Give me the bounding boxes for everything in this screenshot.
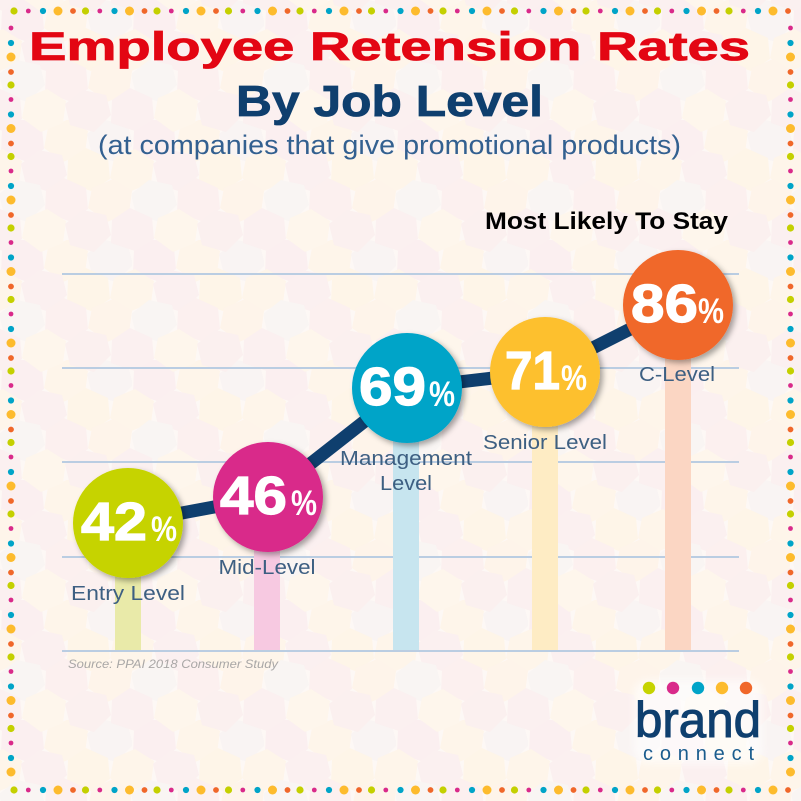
logo wordmark: brand bbox=[635, 692, 761, 748]
grid lines bbox=[62, 274, 739, 651]
chart bbox=[62, 250, 739, 651]
logo tagline: connect bbox=[643, 743, 754, 765]
circle: 69%: % bbox=[429, 375, 455, 414]
circle: 46%: % bbox=[291, 484, 317, 523]
circle: 69%: 69 bbox=[359, 357, 426, 417]
source note: Source: PPAI 2018 Consumer Study bbox=[68, 659, 279, 671]
circle: 86%: 86 bbox=[631, 274, 698, 334]
circle: 71%: 71 bbox=[505, 341, 560, 401]
circle: 86%: % bbox=[698, 292, 724, 331]
circle: 46%: 46 bbox=[220, 466, 287, 526]
qualifier text: (at companies that give promotional products) bbox=[98, 130, 681, 160]
circle: 71% bbox=[490, 317, 600, 427]
circle: 69% bbox=[352, 333, 462, 443]
label: mid level: Mid-Level bbox=[218, 556, 316, 579]
circle: 42%: 42 bbox=[81, 492, 147, 552]
logo halo bbox=[634, 680, 762, 764]
circle: 42% bbox=[73, 468, 183, 578]
label: management level: Level bbox=[380, 472, 432, 495]
bars bbox=[115, 340, 691, 650]
circle: 46% bbox=[213, 442, 323, 552]
label: management level: Management bbox=[340, 447, 472, 470]
most likely label: Most Likely To Stay bbox=[485, 208, 729, 235]
circle: 42%: % bbox=[151, 510, 177, 549]
connecting line bbox=[128, 305, 678, 523]
label: entry level: Entry Level bbox=[71, 582, 185, 605]
label: management level bbox=[340, 447, 472, 495]
title: Employee Retension Rates bbox=[29, 25, 750, 69]
circle: 71%: % bbox=[561, 359, 587, 398]
subtitle heading: By Job Level bbox=[236, 77, 543, 126]
logo: brand connect bbox=[634, 680, 762, 765]
circle: 86% bbox=[623, 250, 733, 360]
logo dots bbox=[643, 682, 752, 694]
label: c-level: C-Level bbox=[639, 363, 715, 386]
label: senior level: Senior Level bbox=[483, 431, 607, 454]
